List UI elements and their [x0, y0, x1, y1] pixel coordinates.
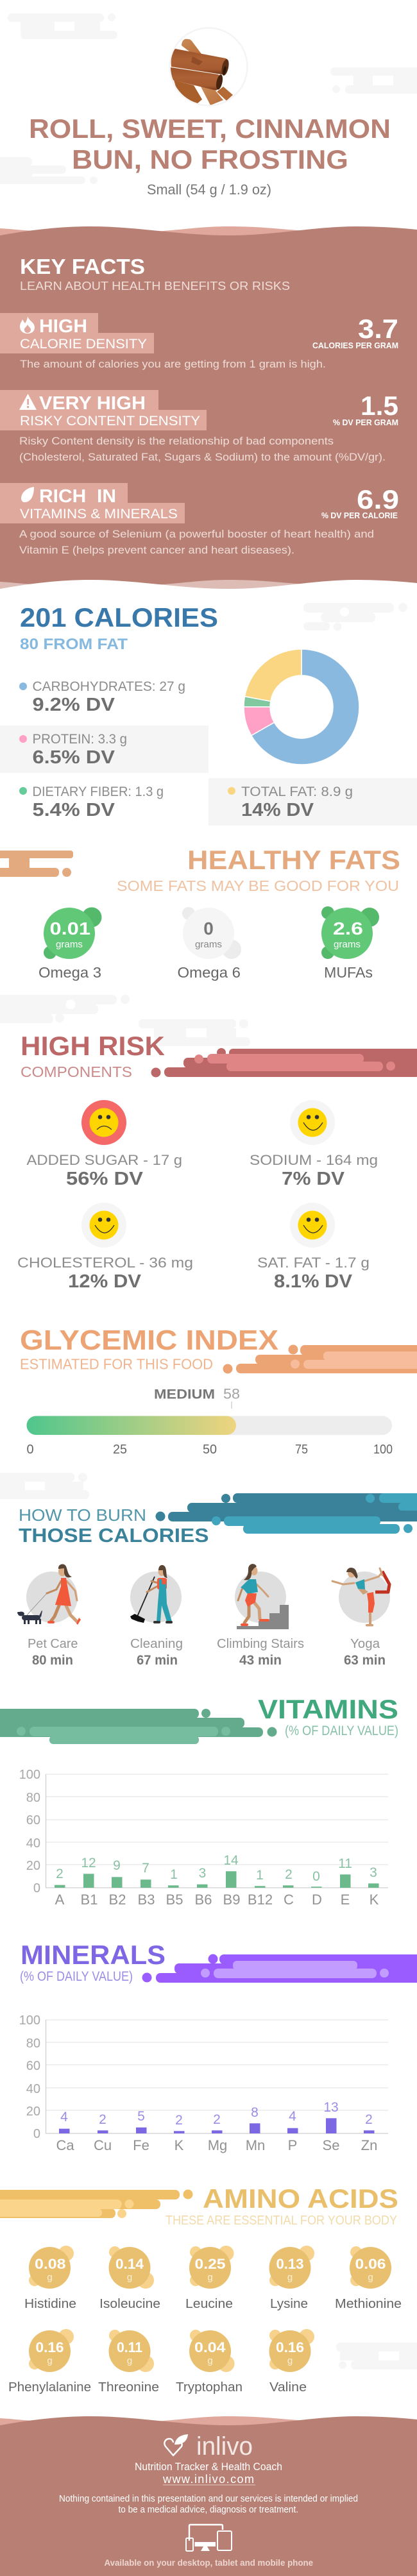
bubble: phenylalanine: 0.16: [36, 2339, 64, 2355]
bubble: threonine: g: [127, 2355, 132, 2366]
heading: amino acids: AMINO ACIDS: [203, 2183, 398, 2214]
bar chart: minerals: 5: [137, 2109, 145, 2124]
bubble: isoleucine: 0.14: [115, 2256, 144, 2272]
bar chart: minerals: 2: [99, 2112, 106, 2127]
legend: total fat: TOTAL FAT: 8.9 g: [241, 784, 353, 799]
bar chart: minerals: 8: [251, 2105, 259, 2120]
bar chart: vitamins: 14: [223, 1853, 239, 1868]
bubble: isoleucine: [99, 2246, 160, 2311]
fact: vitamins and minerals: % DV PER CALORIE: [321, 511, 398, 520]
bar chart: vitamins: B9: [223, 1892, 240, 1908]
title: BUN, NO FROSTING: [72, 144, 348, 174]
bubble: leucine: [185, 2246, 234, 2311]
gauge scale: 100: [373, 1443, 393, 1457]
subheading: essential: THESE ARE ESSENTIAL FOR YOUR BODY: [166, 2214, 397, 2228]
icon: flame: [20, 316, 35, 334]
subheading: estimated: ESTIMATED FOR THIS FOOD: [20, 1356, 213, 1373]
gauge bar: [27, 1416, 392, 1435]
fact: calorie density: The amount of calories you are getting from 1 gram is high.: [20, 358, 326, 370]
fact: calorie density: CALORIE DENSITY: [20, 336, 147, 352]
component: saturated fat: SAT. FAT - 1.7 g: [257, 1255, 370, 1271]
bar chart: minerals: Fe: [133, 2137, 149, 2153]
bar chart: vitamins: 11: [338, 1856, 352, 1871]
panel: healthy fats: [0, 845, 400, 981]
fact: risky content density: (Cholesterol, Saturated Fat, Sugars & Sodium) to the amount (%DV/gr).: [19, 451, 386, 463]
bar chart: vitamins: B1: [81, 1892, 98, 1908]
bubble: omega 6: grams: [195, 939, 222, 950]
component: added sugar: ADDED SUGAR - 17 g: [27, 1152, 182, 1168]
subheading: key facts: LEARN ABOUT HEALTH BENEFITS OR RISKS: [20, 280, 290, 292]
title: ROLL, SWEET, CINNAMON: [29, 114, 391, 144]
fact: risky content density: VERY HIGH: [39, 393, 146, 414]
bar chart: minerals: 2: [365, 2112, 373, 2127]
tagline: Nutrition Tracker & Health Coach: [135, 2461, 282, 2473]
bar chart: minerals: Cu: [94, 2137, 112, 2153]
bar chart: minerals: 40: [26, 2082, 40, 2096]
heading: glycemic index: GLYCEMIC INDEX: [20, 1325, 278, 1356]
legend: protein: PROTEIN: 3.3 g: [32, 732, 127, 747]
bubble: methionine: [335, 2246, 402, 2311]
bar chart: vitamins: K: [370, 1892, 379, 1908]
bar chart: vitamins: [19, 1768, 388, 1908]
bubble: methionine: 0.06: [355, 2256, 386, 2272]
fact: vitamins and minerals: A good source of Selenium (a powerful booster of heart health) and: [19, 528, 374, 540]
disclaimer: Nothing contained in this presentation and our services is intended or implied: [59, 2494, 358, 2504]
fact: risky content density: Risky Content density is the relationship of bad components: [19, 435, 334, 447]
heading: high risk: HIGH RISK: [21, 1031, 165, 1061]
bar chart: vitamins: 0: [33, 1881, 40, 1895]
background cloud: burn: [0, 1473, 89, 1499]
bubble: omega 3: 0.01: [50, 919, 90, 938]
panel: vitamins: [0, 1694, 398, 1908]
bubble: threonine: Threonine: [98, 2380, 159, 2394]
bar chart: vitamins: 12: [81, 1856, 96, 1870]
fact: risky content density: 1.5: [361, 391, 398, 421]
bubble: valine: [269, 2329, 314, 2394]
background clouds: header: [0, 13, 417, 184]
fact: calorie density: HIGH: [39, 316, 87, 337]
availability note: Available on your desktop, tablet and mobile phone: [104, 2557, 313, 2568]
bar chart: vitamins: 2: [285, 1867, 293, 1882]
heading: how to burn: HOW TO BURN: [19, 1505, 146, 1525]
website link: www.inlivo.com: [162, 2473, 254, 2486]
bubble: mufas: 2.6: [333, 919, 363, 938]
panel: calories: [0, 602, 417, 826]
bar chart: minerals: 100: [19, 2013, 40, 2028]
serving size: Small (54 g / 1.9 oz): [147, 182, 271, 198]
bubble: omega 6: 0: [203, 919, 214, 938]
heading: vitamins: VITAMINS: [258, 1694, 398, 1724]
component: cholesterol: 12% DV: [68, 1271, 142, 1292]
gauge label: medium 58: [154, 1385, 240, 1409]
bubble: tryptophan: 0.04: [194, 2339, 226, 2355]
bar chart: vitamins: B2: [109, 1892, 126, 1908]
fact: calorie density: CALORIES PER GRAM: [312, 341, 398, 350]
decoration: minerals: [142, 1954, 417, 1983]
activity: yoga: Yoga: [350, 1637, 380, 1651]
fact: vitamins and minerals: 6.9: [357, 484, 399, 514]
bubble: lysine: Lysine: [270, 2297, 308, 2311]
bubble: omega 3: grams: [56, 939, 83, 950]
bar chart: vitamins: B12: [248, 1892, 273, 1908]
bar chart: vitamins: B3: [138, 1892, 155, 1908]
decoration: glycemic: [223, 1344, 417, 1374]
background clouds: high risk: [0, 995, 250, 1046]
bubble: methionine: g: [368, 2272, 373, 2283]
panel: high risk components: [17, 1031, 417, 1292]
component: added sugar: [27, 1100, 182, 1189]
decoration: burn: [155, 1493, 417, 1534]
decoration: high risk: [151, 1048, 417, 1078]
fact: vitamins and minerals: RICH IN: [39, 486, 116, 507]
bar chart: minerals: 0: [33, 2127, 40, 2141]
bar chart: vitamins: 0: [312, 1869, 320, 1884]
bar chart: vitamins: 1: [170, 1867, 178, 1882]
bar chart: vitamins: 3: [370, 1865, 377, 1880]
panel: footer: [0, 2416, 417, 2576]
bar chart: vitamins: A: [55, 1892, 65, 1908]
gauge scale: 75: [295, 1443, 308, 1457]
gauge scale: 50: [203, 1443, 217, 1457]
fact: risky content density: [0, 390, 398, 463]
bar chart: minerals: 60: [26, 2059, 40, 2073]
bubble: histidine: [24, 2246, 76, 2311]
bar chart: vitamins: 7: [142, 1861, 149, 1876]
fact: vitamins and minerals: VITAMINS & MINERALS: [20, 506, 178, 521]
bar chart: vitamins: 80: [26, 1791, 40, 1805]
background cloud: amino: [336, 2343, 417, 2369]
bar chart: minerals: P: [288, 2137, 297, 2153]
background cloud: [303, 603, 407, 631]
gauge scale: 0: [27, 1443, 34, 1457]
panel: glycemic index: [20, 1325, 417, 1457]
fact: risky content density: RISKY CONTENT DENSITY: [20, 413, 200, 428]
legend: total fat: [208, 778, 417, 826]
bubble: omega 6: [177, 907, 241, 981]
activity: climbing stairs: Climbing Stairs: [217, 1637, 304, 1651]
decoration: vitamins: [0, 1709, 277, 1744]
bubble: histidine: Histidine: [24, 2297, 76, 2311]
bar chart: vitamins: E: [341, 1892, 350, 1908]
legend: total fat: 14% DV: [241, 800, 314, 820]
food image: cinnamon rolls: [169, 28, 248, 105]
gauge scale: 25: [113, 1443, 127, 1457]
bubble: phenylalanine: [8, 2329, 91, 2394]
activity: cleaning: Cleaning: [130, 1637, 183, 1651]
legend: dietary fiber: [19, 784, 164, 820]
fact: vitamins and minerals: [0, 483, 399, 556]
bar chart: vitamins: 60: [26, 1813, 40, 1827]
logo: inlivo: [164, 2432, 253, 2461]
bubble: tryptophan: g: [207, 2355, 213, 2366]
component: added sugar: 56% DV: [66, 1169, 144, 1189]
bar chart: minerals: K: [174, 2137, 184, 2153]
bubble: isoleucine: Isoleucine: [99, 2297, 160, 2311]
icon: leaf: [21, 487, 34, 502]
panel: amino acids: [0, 2183, 417, 2394]
bubble: phenylalanine: g: [47, 2355, 53, 2366]
bubble: valine: Valine: [269, 2380, 307, 2394]
activity: yoga: 63 min: [344, 1653, 386, 1668]
bubble: lysine: 0.13: [276, 2256, 304, 2272]
bubble: histidine: 0.08: [35, 2256, 65, 2272]
bubble: mufas: MUFAs: [324, 964, 373, 981]
bubble: threonine: [98, 2330, 159, 2394]
bar chart: vitamins: D: [312, 1892, 322, 1908]
icon: devices: [186, 2525, 232, 2551]
legend: carbohydrates: 9.2% DV: [32, 695, 115, 715]
component: cholesterol: [17, 1203, 193, 1292]
heading: key facts: KEY FACTS: [20, 255, 145, 278]
activity: yoga: [332, 1568, 390, 1668]
bar chart: minerals: 13: [323, 2100, 339, 2115]
bubble: tryptophan: Tryptophan: [176, 2380, 243, 2394]
bar chart: vitamins: 9: [113, 1858, 121, 1873]
component: sodium: [250, 1100, 378, 1189]
activity: pet care: [17, 1564, 81, 1668]
bar chart: vitamins: 1: [256, 1868, 264, 1883]
bubble: omega 6: Omega 6: [177, 964, 241, 981]
disclaimer: [59, 2494, 358, 2515]
activity: climbing stairs: 43 min: [239, 1653, 282, 1668]
donut chart: [244, 649, 359, 765]
legend: carbohydrates: CARBOHYDRATES: 27 g: [32, 679, 185, 694]
bubble: methionine: Methionine: [335, 2297, 402, 2311]
heading: those calories: THOSE CALORIES: [19, 1524, 209, 1546]
subheading: percent daily value: (% OF DAILY VALUE): [285, 1724, 398, 1738]
gauge label: medium 58: 58: [223, 1385, 240, 1402]
legend: dietary fiber: 5.4% DV: [32, 800, 115, 820]
bubble: omega 3: [38, 907, 101, 981]
decoration: amino acids: [0, 2190, 192, 2218]
activity: pet care: 80 min: [32, 1653, 73, 1668]
decoration: healthy fats: [0, 851, 73, 877]
bar chart: minerals: Mn: [246, 2137, 265, 2153]
heading: minerals: MINERALS: [21, 1940, 166, 1970]
fact: calorie density: [0, 313, 398, 370]
bar chart: minerals: Ca: [56, 2137, 74, 2153]
activity: climbing stairs: [217, 1564, 304, 1668]
gauge scale: [27, 1443, 393, 1457]
heading: healthy fats: HEALTHY FATS: [187, 845, 400, 875]
bar chart: vitamins: 20: [26, 1859, 40, 1873]
bar chart: vitamins: B6: [195, 1892, 212, 1908]
bar chart: minerals: 2: [175, 2113, 183, 2128]
heading: calories: 201 CALORIES: [20, 602, 218, 632]
bubble: valine: 0.16: [276, 2339, 304, 2355]
legend: carbohydrates: [19, 679, 185, 715]
subheading: components: COMPONENTS: [21, 1063, 132, 1080]
legend: protein: 6.5% DV: [32, 747, 115, 768]
bubble: threonine: 0.11: [117, 2339, 142, 2355]
fact: calorie density: 3.7: [358, 314, 398, 344]
panel: key facts: [0, 226, 417, 600]
component: sodium: SODIUM - 164 mg: [250, 1152, 378, 1168]
activity: cleaning: 67 min: [137, 1653, 178, 1668]
bar chart: vitamins: 40: [26, 1836, 40, 1851]
component: cholesterol: CHOLESTEROL - 36 mg: [17, 1255, 193, 1271]
panel: minerals: [19, 1940, 417, 2153]
bar chart: minerals: 2: [213, 2112, 221, 2127]
bubble: leucine: g: [207, 2272, 213, 2283]
bubble: lysine: [269, 2246, 314, 2311]
gauge label: medium 58: MEDIUM: [154, 1387, 215, 1402]
activity: cleaning: [130, 1565, 183, 1668]
disclaimer: to be a medical advice, diagnosis or treatment.: [118, 2505, 298, 2515]
bar chart: minerals: 20: [26, 2105, 40, 2119]
bar chart: vitamins: 3: [199, 1866, 206, 1881]
activity: pet care: Pet Care: [28, 1637, 78, 1651]
bar chart: minerals: Se: [323, 2137, 339, 2153]
bubble: mufas: grams: [334, 939, 361, 950]
subheading: healthy fats: SOME FATS MAY BE GOOD FOR YOU: [117, 877, 399, 894]
bar chart: vitamins: C: [284, 1892, 294, 1908]
bar chart: minerals: Zn: [361, 2137, 377, 2153]
icon: warning triangle: [19, 394, 37, 410]
subheading: from fat: 80 FROM FAT: [20, 636, 128, 653]
title: [29, 114, 391, 174]
legend: protein: [0, 725, 208, 773]
bar chart: vitamins: 100: [19, 1768, 40, 1782]
bubble: phenylalanine: Phenylalanine: [8, 2380, 91, 2394]
component: saturated fat: [257, 1203, 370, 1292]
bar chart: vitamins: 2: [56, 1867, 64, 1881]
bubble: lysine: g: [287, 2272, 293, 2283]
bubble: omega 3: Omega 3: [38, 964, 101, 981]
fact: vitamins and minerals: Vitamin E (helps prevent cancer and heart diseases).: [19, 544, 294, 556]
panel: how to burn: [17, 1493, 417, 1668]
bubble: histidine: g: [47, 2272, 53, 2283]
component: saturated fat: 8.1% DV: [274, 1271, 353, 1292]
component: sodium: 7% DV: [282, 1169, 345, 1189]
fact: risky content density: % DV PER GRAM: [333, 418, 398, 427]
logo: inlivo: inlivo: [196, 2432, 253, 2461]
bar chart: vitamins: B5: [166, 1892, 183, 1908]
bar chart: minerals: [19, 2013, 388, 2153]
bubble: valine: g: [287, 2355, 293, 2366]
legend: dietary fiber: DIETARY FIBER: 1.3 g: [32, 784, 164, 799]
bubble: leucine: 0.25: [195, 2256, 226, 2272]
bubble: mufas: [321, 906, 379, 981]
bubble: tryptophan: [176, 2330, 243, 2394]
bar chart: minerals: Mg: [208, 2137, 227, 2153]
bar chart: minerals: 4: [60, 2110, 68, 2124]
bar chart: minerals: 80: [26, 2037, 40, 2051]
bubble: isoleucine: g: [127, 2272, 132, 2283]
subheading: percent daily value: (% OF DAILY VALUE): [20, 1969, 133, 1984]
bar chart: minerals: 4: [289, 2109, 296, 2124]
bubble: leucine: Leucine: [185, 2297, 233, 2311]
